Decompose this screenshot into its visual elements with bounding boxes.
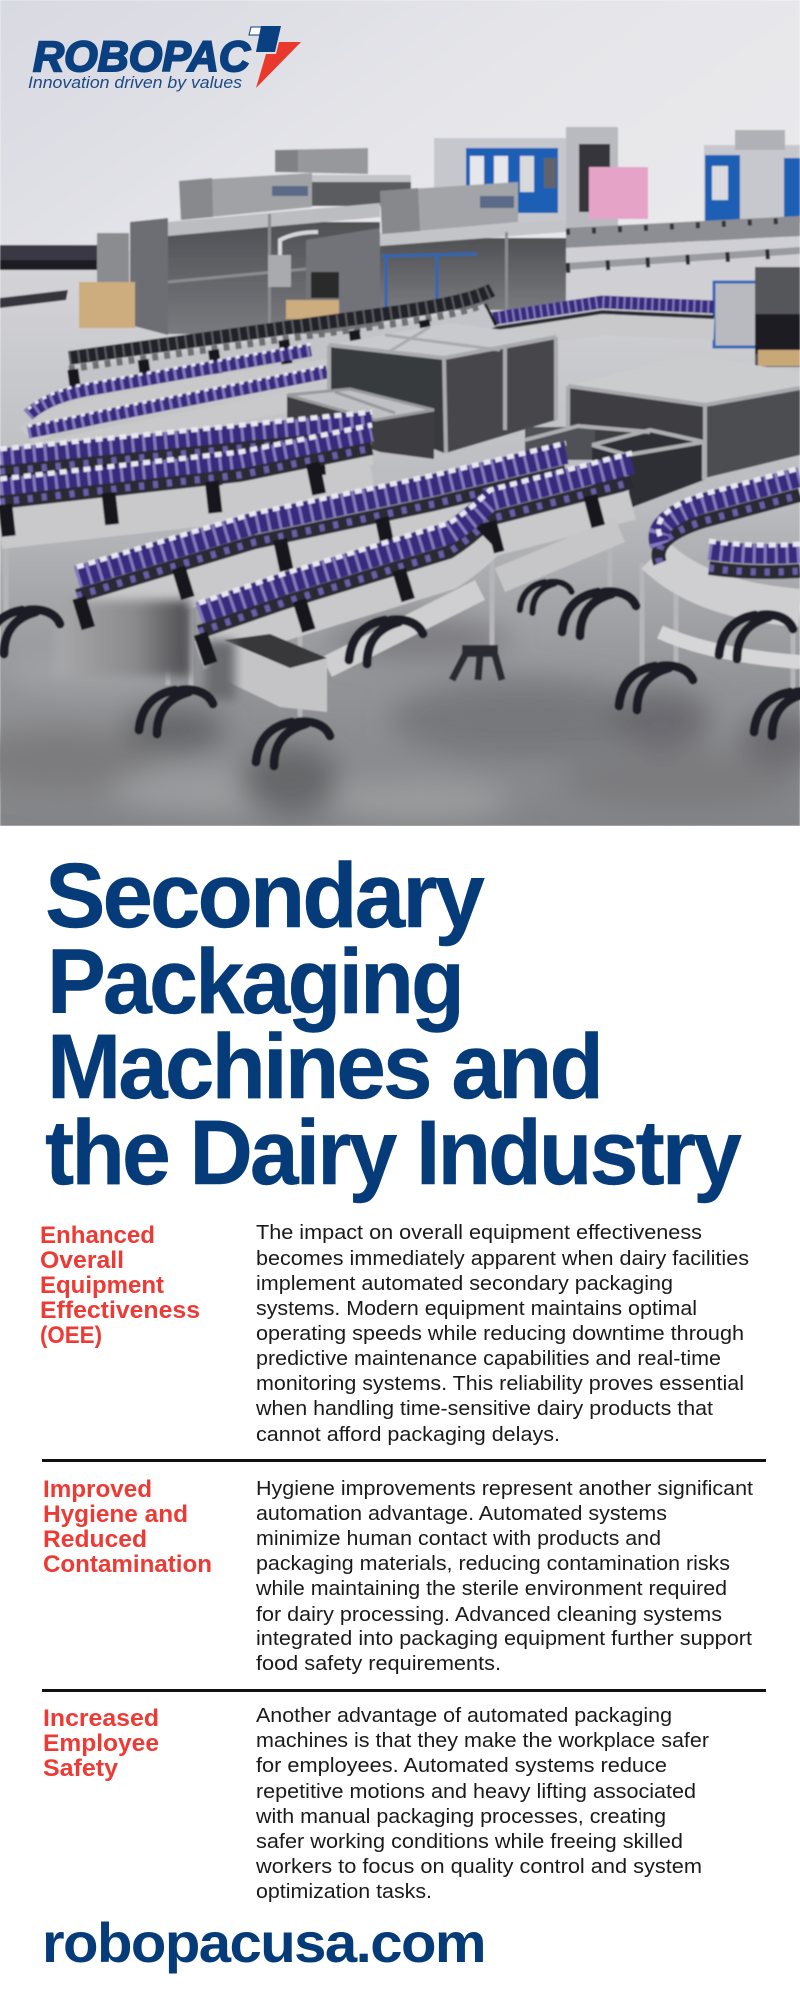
section 1: Enhanced Overall Equipment Effectiveness [40,1222,749,1446]
dark conveyor [69,290,492,382]
section 1 heading: (OEE) [40,1322,102,1349]
section 1 body: implement automated secondary packaging [256,1273,673,1295]
right glass enclosure [268,220,566,326]
background wall [0,0,800,330]
section 3 heading: Safety [43,1755,119,1782]
section 2 heading: Reduced [43,1526,147,1553]
conveyor legs [6,447,793,720]
purple conveyors, back left [28,344,327,454]
purple conveyor panels [0,450,800,667]
section 2 heading: Improved [43,1476,152,1503]
centre black cabinet [329,323,556,453]
section 3: Increased Employee Safety [43,1705,709,1903]
blurred support box, left [55,600,190,676]
pink pallet [589,167,648,219]
blue machine, right [704,130,800,245]
section 3 body: workers to focus on quality control and system [255,1856,702,1878]
section 1 heading: Equipment [40,1272,164,1299]
section 2 heading: Contamination [43,1551,212,1578]
blue machine, centre back [434,127,618,232]
section 3 body: repetitive motions and heavy lifting associated [256,1781,696,1803]
support box, front [205,634,327,712]
section 2 body: food safety requirements. [256,1653,501,1675]
section 1 heading [40,1222,200,1349]
right overhead conveyor [566,216,800,310]
right side machine [714,267,800,367]
title: the Dairy Industry [45,1102,742,1204]
section 3 body: Another advantage of automated packaging [256,1705,672,1727]
section 3 body [255,1705,709,1903]
section 1 body: predictive maintenance capabilities and real-time [256,1348,721,1370]
title [45,845,742,1204]
section 3 body: with manual packaging processes, creating [255,1806,666,1828]
photo: automated packaging line [0,0,800,826]
right hopper [380,182,518,234]
section 3 body: for employees. Automated systems reduce [256,1755,667,1777]
section 2 body: Hygiene improvements represent another significant [256,1478,753,1500]
section 2 body: integrated into packaging equipment further support [256,1628,752,1650]
title: Machines and [47,1016,601,1118]
section 1 heading: Enhanced [40,1222,155,1249]
floor stand feet [0,582,800,766]
section 3 heading [43,1705,159,1782]
back grey hopper [275,148,411,206]
section 1 body: cannot afford packaging delays. [256,1424,560,1446]
purple conveyors with bottles [0,412,800,651]
section 2 body: minimize human contact with products and [256,1528,661,1550]
section 2 body [255,1478,753,1675]
stand with casters [452,645,502,680]
section 1 body: systems. Modern equipment maintains optimal [256,1298,697,1320]
section 1 body: when handling time-sensitive dairy products that [255,1398,713,1420]
section 1 body: operating speeds while reducing downtime through [256,1323,744,1345]
section 2 body: packaging materials, reducing contamination risks [256,1553,730,1575]
right black cabinet [568,355,800,478]
logo wordmark: ROBOPAC [33,33,251,81]
section 1 body: monitoring systems. This reliability proves essential [256,1373,744,1395]
section 1 body [255,1222,749,1446]
section 2 heading [43,1476,212,1578]
left back conveyor [0,233,129,308]
section 2: Improved Hygiene and Reduced Contamination [43,1476,753,1675]
left glass enclosure [130,203,380,335]
section 2 body: for dairy processing. Advanced cleaning systems [256,1604,722,1626]
title: Secondary [45,845,485,947]
website url: robopacusa.com [42,1911,485,1974]
left hopper [179,173,312,220]
logo tagline: Innovation driven by values [28,74,242,92]
section 3 heading: Increased [43,1705,159,1732]
section 1 body: becomes immediately apparent when dairy facilities [256,1248,749,1270]
section 1 body: The impact on overall equipment effectiveness [256,1222,702,1244]
logo mark [249,26,301,88]
section 2 body: while maintaining the sterile environment required [255,1578,727,1600]
logo: Robopac [28,26,301,92]
section 2 body: automation advantage. Automated systems [256,1503,667,1525]
title: Packaging [47,931,462,1033]
wooden cartons [79,282,339,328]
section 1 heading: Overall [40,1247,124,1274]
small cabinets [287,389,704,510]
section 3 body: optimization tasks. [256,1881,432,1903]
section 2 heading: Hygiene and [43,1501,188,1528]
section 3 body: safer working conditions while freeing skilled [256,1831,683,1853]
factory floor [0,250,800,826]
back purple conveyor [464,302,714,345]
section 3 body: machines is that they make the workplace safer [256,1730,709,1752]
section 3 heading: Employee [43,1730,159,1757]
section 1 heading: Effectiveness [40,1297,200,1324]
